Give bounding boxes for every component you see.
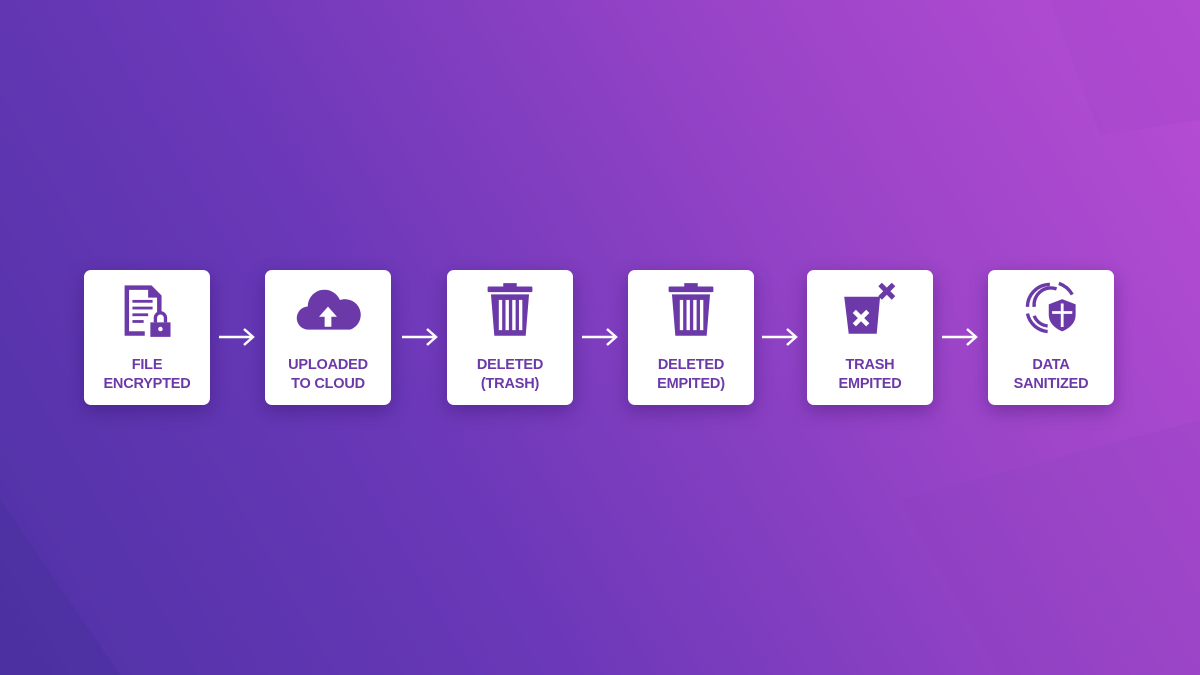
card: trash emptied: EMPITED — [838, 376, 902, 392]
card: data sanitized: DATA — [1032, 357, 1070, 373]
arrow 5 — [942, 328, 978, 346]
icon: swirl with shield — [1026, 282, 1076, 334]
icon: trash can — [488, 283, 532, 336]
card: uploaded to cloud — [265, 270, 391, 405]
card: deleted trash: DELETED — [477, 357, 543, 373]
card: uploaded to cloud: UPLOADED — [288, 357, 368, 373]
card: file encrypted: ENCRYPTED — [103, 376, 191, 392]
arrow 1 — [219, 328, 255, 346]
card: file encrypted: FILE — [132, 357, 162, 373]
icon: file with lock — [124, 285, 170, 337]
card: data sanitized — [988, 270, 1114, 405]
card: deleted trash: (TRASH) — [481, 376, 539, 392]
card: deleted emptied: EMPITED) — [657, 376, 725, 392]
icon: cloud upload — [296, 290, 361, 330]
card: data sanitized: SANITIZED — [1014, 376, 1088, 392]
card: uploaded to cloud: TO CLOUD — [291, 376, 365, 392]
icon: trash can — [668, 283, 714, 336]
arrow 3 — [582, 328, 618, 346]
card: deleted emptied: DELETED — [658, 357, 724, 373]
icon: bin with x — [844, 282, 896, 334]
card: file encrypted — [84, 270, 210, 405]
arrow 2 — [402, 328, 438, 346]
card: deleted emptied — [628, 270, 754, 405]
arrow 4 — [762, 328, 798, 346]
card: trash emptied — [807, 270, 933, 405]
card: trash emptied: TRASH — [846, 357, 894, 373]
card: deleted trash — [447, 270, 573, 405]
